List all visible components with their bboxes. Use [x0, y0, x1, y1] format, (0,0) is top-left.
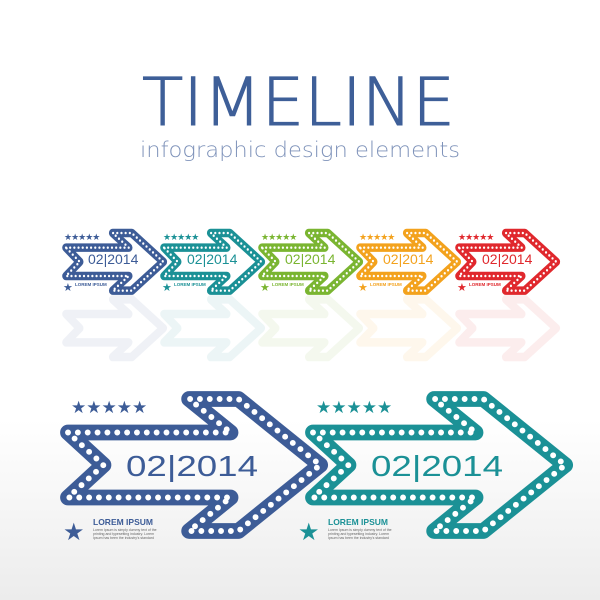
small arrow: teal	[162, 232, 261, 294]
subtitle: infographic design elements	[140, 138, 460, 162]
small arrow: orange: ★★★★★	[359, 232, 395, 242]
small arrow: red: ★★★★★	[458, 232, 494, 242]
small arrow: teal: ★★★★★	[163, 232, 199, 242]
small arrow: green: LOREM IPSUM	[272, 282, 304, 287]
small arrow: teal: LOREM IPSUM	[174, 282, 206, 287]
small arrow: red: ★	[457, 282, 467, 294]
small arrows row	[63, 232, 556, 294]
small arrow: teal: ★	[162, 282, 172, 294]
big arrow: teal: Ipsum has been the industry's standard	[328, 536, 389, 540]
big arrow: blue	[63, 398, 320, 546]
big arrow: teal: LOREM IPSUM	[328, 517, 388, 527]
small arrow: blue	[63, 232, 163, 294]
small arrow: orange: 02|2014	[383, 251, 434, 267]
small arrow: blue: LOREM IPSUM	[75, 282, 107, 287]
small arrow: orange	[358, 232, 457, 294]
big arrow: teal: ★★★★★	[316, 398, 392, 417]
big arrow: blue: LOREM IPSUM	[93, 517, 153, 527]
small arrow: red: LOREM IPSUM	[469, 282, 501, 287]
small arrow: orange: LOREM IPSUM	[370, 282, 402, 287]
big arrow: teal: ★	[298, 519, 320, 546]
big arrow: blue: Ipsum has been the industry's standard	[93, 536, 154, 540]
big arrow: blue: ★	[63, 519, 85, 546]
big arrow: teal	[298, 398, 565, 546]
big arrow: blue: ★★★★★	[71, 398, 147, 417]
big arrow: teal: Lorem Ipsum is simply dummy text of the	[328, 528, 392, 532]
small arrow: teal: 02|2014	[187, 251, 238, 267]
small arrow: blue: 02|2014	[88, 251, 139, 267]
small arrow: green: ★	[260, 282, 270, 294]
big arrow: blue: 02|2014	[126, 451, 258, 483]
small arrow: blue: ★	[63, 282, 73, 294]
reflection of small arrows	[66, 299, 556, 357]
small arrow: red: 02|2014	[482, 251, 533, 267]
big arrow: blue: Lorem Ipsum is simply dummy text of the	[93, 528, 157, 532]
big arrow: blue: printing and typesetting industry. Lorem	[93, 532, 154, 536]
big arrow: teal: 02|2014	[371, 451, 503, 483]
small arrow: green: ★★★★★	[261, 232, 297, 242]
big arrow: teal: printing and typesetting industry. Lorem	[328, 532, 389, 536]
small arrow: orange: ★	[358, 282, 368, 294]
small arrow: green	[260, 232, 359, 294]
title: TIMELINE	[142, 64, 455, 141]
small arrow: blue: ★★★★★	[64, 232, 100, 242]
small arrow: green: 02|2014	[285, 251, 336, 267]
small arrow: red	[457, 232, 556, 294]
